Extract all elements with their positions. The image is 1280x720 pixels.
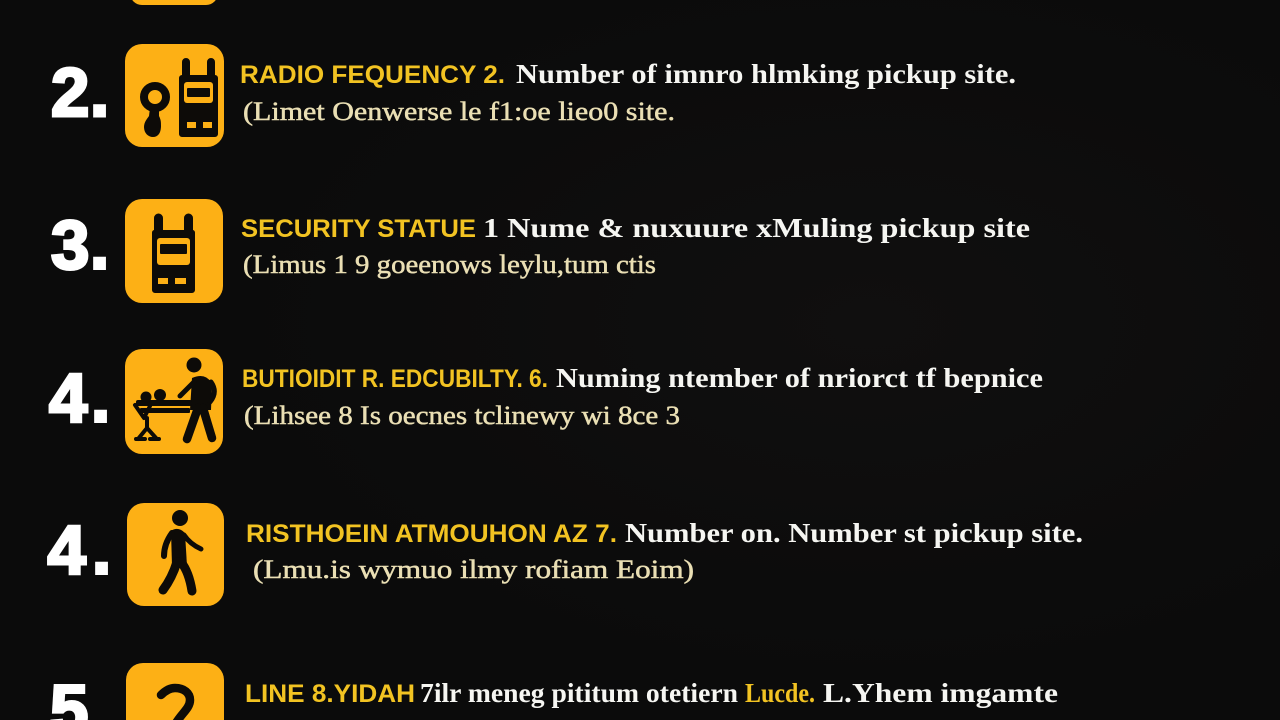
heading: SECURITY STATUE xyxy=(241,215,476,243)
list item 2: radio frequency xyxy=(51,44,1016,147)
heading: LINE 8.YIDAH xyxy=(245,680,415,708)
number 4: . xyxy=(92,512,111,588)
list item 3: security status xyxy=(51,199,1030,303)
description continued: L.Yhem imgamte xyxy=(823,678,1058,708)
description: 1 Nume & nuxuure xMuling pickup site xyxy=(483,213,1030,243)
number 4: 4 xyxy=(49,360,87,436)
description: Numing ntember of nriorct tf bepnice xyxy=(556,363,1043,393)
number 2: . xyxy=(90,54,109,131)
description: Number on. Number st pickup site. xyxy=(625,518,1083,548)
icon: radio xyxy=(125,199,223,303)
heading: RADIO FEQUENCY 2. xyxy=(240,61,505,89)
note: (Lihsee 8 Is oecnes tclinewy wi 8ce 3 xyxy=(244,401,680,430)
description: Number of imnro hlmking pickup site. xyxy=(516,59,1016,89)
note: (Limus 1 9 goeenows leylu,tum ctis xyxy=(243,250,656,279)
heading: RISTHOEIN ATMOUHON AZ 7. xyxy=(246,520,617,548)
number 2: 2 xyxy=(51,54,89,131)
number 4 xyxy=(49,360,110,436)
note: (Lmu.is wymuo ilmy rofiam Eoim) xyxy=(253,555,694,584)
number 3: 3 xyxy=(51,206,89,284)
number 4: 4 xyxy=(48,512,86,588)
note: (Limet Oenwerse le f1:oe lieo0 site. xyxy=(243,97,675,126)
icon: magnifier and radio xyxy=(125,44,224,147)
number 4: . xyxy=(91,360,110,436)
number 3: . xyxy=(90,206,109,284)
list item 5: line and year xyxy=(50,663,1058,720)
description: 7ilr meneg pititum otetiern xyxy=(420,678,738,708)
list item 4: building security xyxy=(49,349,1043,454)
highlighted word: Lucde. xyxy=(745,678,815,708)
number 3 xyxy=(51,206,109,284)
number 4 xyxy=(48,512,111,588)
list item 4 second: restroom attraction xyxy=(48,503,1083,606)
partial icon tile at top edge xyxy=(130,0,218,5)
icon: question mark shape xyxy=(126,663,224,720)
number 2 xyxy=(51,54,109,131)
icon: walking person xyxy=(127,503,224,606)
heading: BUTIOIDIT R. EDCUBILTY. 6. xyxy=(242,365,548,393)
icon: person pushing stretcher xyxy=(125,349,223,454)
